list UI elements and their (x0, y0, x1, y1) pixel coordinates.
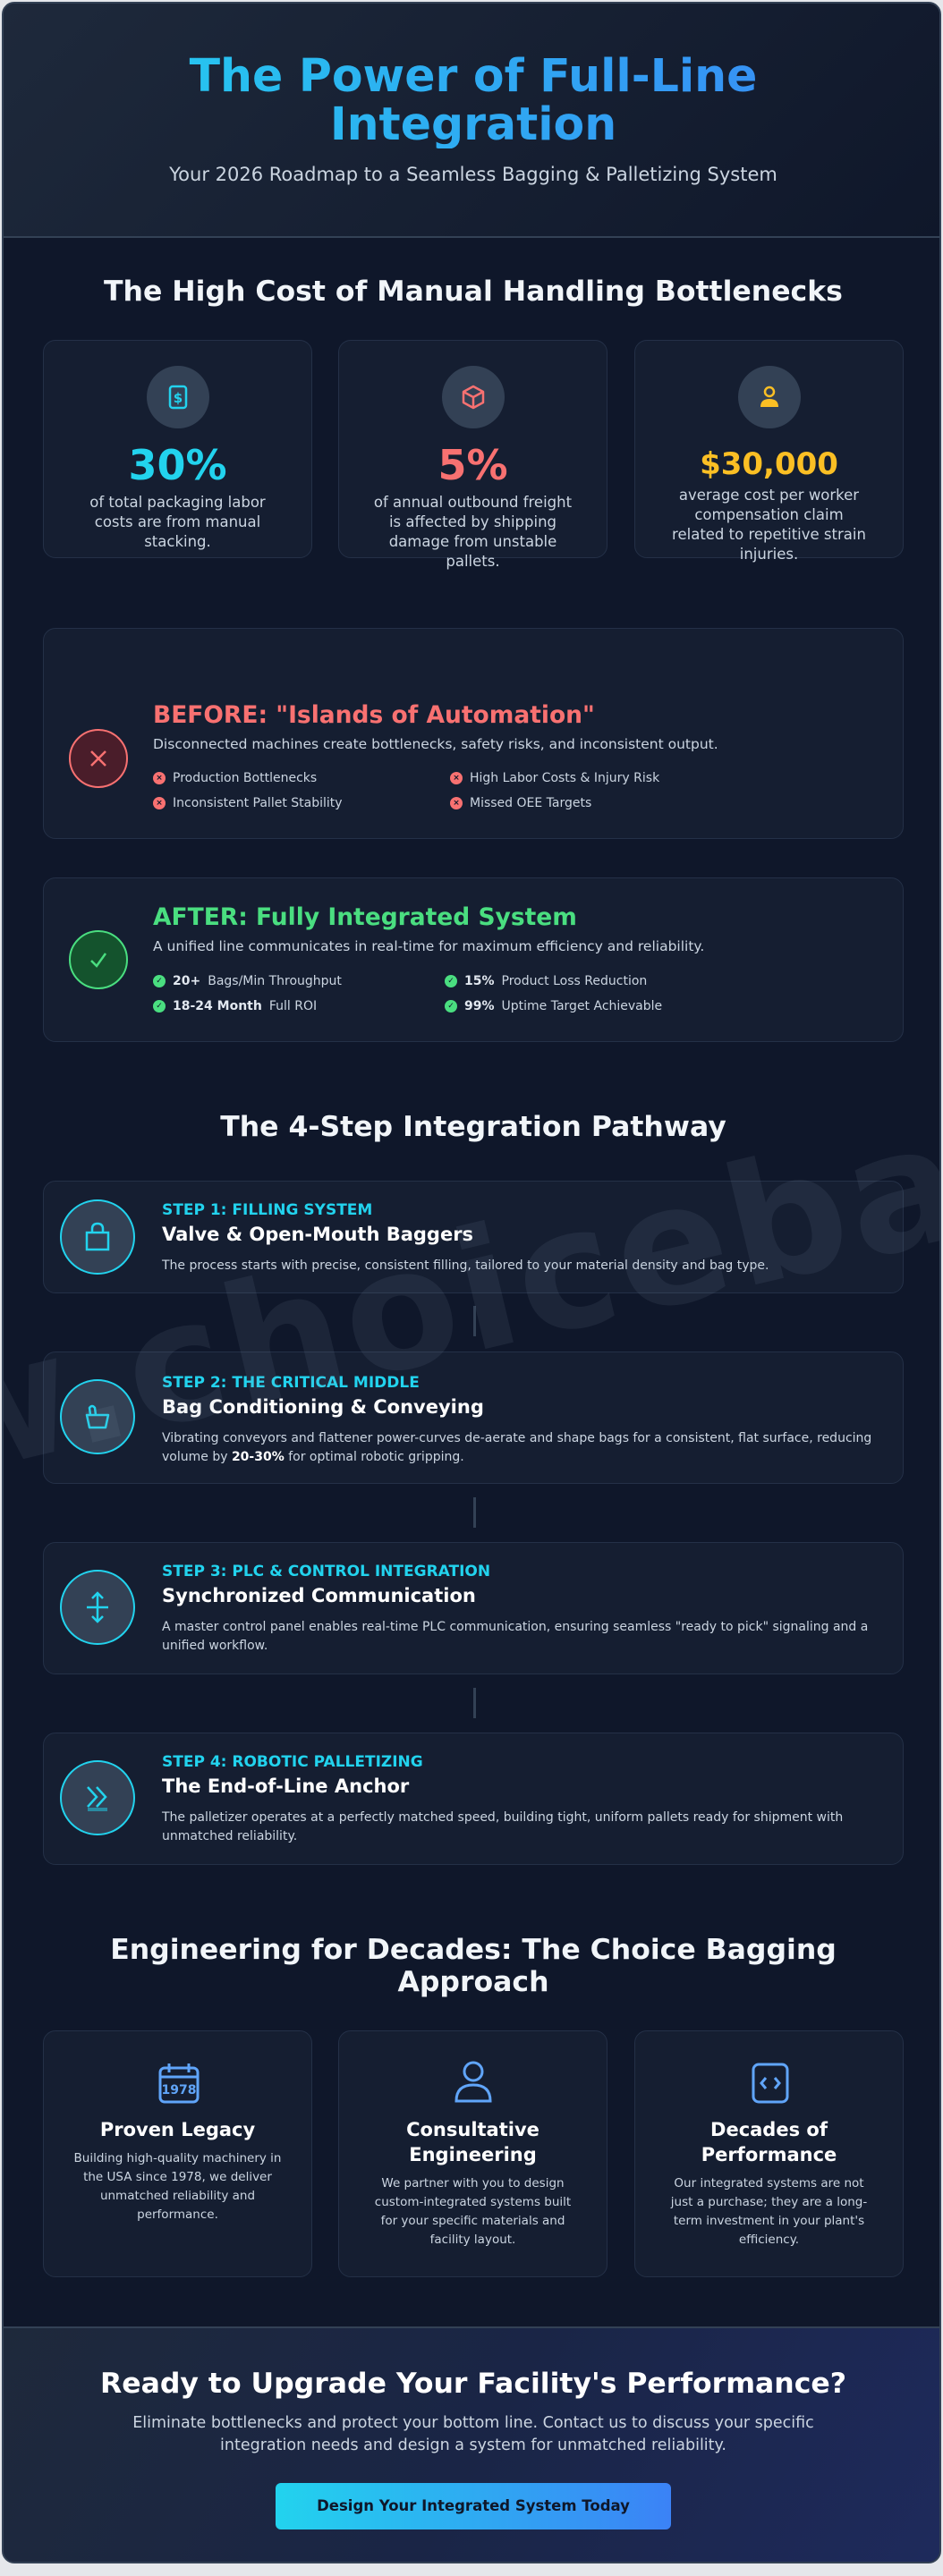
stat card 2 (338, 340, 607, 558)
title: Integration (330, 97, 616, 150)
before heading: BEFORE: "Islands of Automation" (153, 701, 595, 729)
section heading: high cost: The High Cost of Manual Handling Bottlenecks (104, 275, 843, 308)
step 3: A master control panel enables real-time PLC communication, ensuring seamless "ready to pick" signaling and a unified workflow. (162, 1620, 868, 1653)
stat card 1: of total packaging labor costs are from manual stacking. (89, 494, 266, 550)
step 1: STEP 1: FILLING SYSTEM (162, 1201, 372, 1219)
section heading: engineering (110, 1934, 837, 1998)
after bullets: Bags/Min Throughput (208, 974, 342, 988)
feature card 3: Decades of (710, 2119, 828, 2140)
icon: check (69, 930, 128, 989)
section heading: pathway: The 4-Step Integration Pathway (220, 1111, 726, 1143)
step 4 (43, 1733, 904, 1865)
step 1: Valve & Open-Mouth Baggers (162, 1224, 473, 1245)
feature card 1 (43, 2030, 312, 2277)
step 3 (43, 1542, 904, 1674)
icon: worker (738, 366, 801, 428)
before bullets: Production Bottlenecks (173, 771, 317, 785)
icon: code (752, 2063, 789, 2104)
feature card 2: Consultative (406, 2119, 539, 2140)
step 4: The End-of-Line Anchor (162, 1775, 409, 1797)
after bullets: ✓ (156, 1002, 163, 1011)
stat card 1 (43, 340, 312, 558)
stat card 2: 5% (438, 441, 508, 489)
before bullets: × (156, 799, 163, 808)
icon: hand (60, 1379, 135, 1454)
before bullets (153, 771, 660, 810)
before bullets: × (156, 774, 163, 783)
CTA section (4, 2326, 943, 2568)
step 4: The palletizer operates at a perfectly matched speed, building tight, uniform pallets ready for shipment with unmatched reliability. (162, 1810, 843, 1843)
after bullets: ✓ (447, 977, 455, 986)
section heading: engineering: Engineering for Decades: The Choice Bagging (110, 1934, 837, 1966)
panel: after: A unified line communicates in real-time for maximum efficiency and reliability. (153, 938, 704, 954)
stat card 3 (634, 340, 904, 558)
before bullets: × (453, 774, 460, 783)
step 2: STEP 2: THE CRITICAL MIDDLE (162, 1374, 420, 1392)
section heading: engineering: Approach (397, 1966, 549, 1998)
feature card 2 (338, 2030, 607, 2277)
step 3: STEP 3: PLC & CONTROL INTEGRATION (162, 1563, 490, 1580)
icon: bag (60, 1199, 135, 1275)
icon: money: $ (174, 390, 183, 406)
icon: user (455, 2061, 492, 2102)
feature card 2: Engineering (409, 2144, 537, 2165)
step 4: STEP 4: ROBOTIC PALLETIZING (162, 1753, 423, 1771)
CTA text: Eliminate bottlenecks and protect your bottom line. Contact us to discuss your specific integration needs and design a system for unmatched reliability. (132, 2414, 814, 2454)
panel: before: Disconnected machines create bottlenecks, safety risks, and inconsistent output. (153, 736, 718, 752)
feature card 2: We partner with you to design custom-integrated systems built for your specific materials and facility layout. (375, 2176, 571, 2247)
feature card 3 (634, 2030, 904, 2277)
step 2 (43, 1352, 904, 1484)
after bullets: 18-24 Month (173, 999, 262, 1013)
after bullets: 99% (464, 999, 495, 1013)
after bullets: Full ROI (269, 999, 317, 1013)
panel: after (43, 877, 904, 1042)
feature card 1: Proven Legacy (100, 2119, 255, 2140)
stat card 3: $30,000 (700, 446, 838, 482)
feature card 3: Performance (701, 2144, 837, 2165)
header (4, 4, 943, 238)
CTA heading: Ready to Upgrade Your Facility's Performance? (100, 2368, 846, 2400)
after bullets: Product Loss Reduction (502, 974, 647, 988)
after bullets: ✓ (156, 977, 163, 986)
panel: before (43, 628, 904, 839)
stat card 2: of annual outbound freight is affected by shipping damage from unstable pallets. (374, 494, 572, 570)
step 2: Vibrating conveyors and flattener power-curves de-aerate and shape bags for a consistent, flat surface, reducing volume by 20-30% for optimal robotic gripping. (162, 1431, 871, 1464)
step 3: Synchronized Communication (162, 1585, 476, 1606)
icon: calendar: 1978 (162, 2083, 196, 2097)
CTA button: Design Your Integrated System Today (317, 2497, 630, 2514)
title: The Power of Full-Line (190, 49, 757, 102)
icon: calendar (159, 2063, 199, 2104)
icon: x (69, 729, 128, 788)
icon: sync (60, 1570, 135, 1645)
after bullets: 20+ (173, 974, 200, 988)
icon: box (442, 366, 505, 428)
CTA button (276, 2483, 671, 2529)
after bullets (153, 974, 662, 1013)
after bullets: Uptime Target Achievable (502, 999, 662, 1013)
feature card 1: Building high-quality machinery in the USA since 1978, we deliver unmatched reliability and performance. (73, 2151, 281, 2222)
subtitle: Your 2026 Roadmap to a Seamless Bagging & Palletizing System (169, 164, 777, 185)
after bullets: 15% (464, 974, 495, 988)
title (4, 52, 943, 148)
before bullets: High Labor Costs & Injury Risk (470, 771, 659, 785)
icon: money (147, 366, 209, 428)
stat card 1: 30% (128, 441, 227, 489)
feature card 3: Our integrated systems are not just a purchase; they are a long-term investment in your plant's efficiency. (671, 2176, 867, 2247)
icon: chevrons (60, 1760, 135, 1835)
before bullets: × (453, 799, 460, 808)
after bullets: ✓ (447, 1002, 455, 1011)
before bullets: Inconsistent Pallet Stability (173, 796, 343, 810)
step 2: Bag Conditioning & Conveying (162, 1396, 484, 1418)
step 1: The process starts with precise, consistent filling, tailored to your material density and bag type. (162, 1258, 769, 1273)
stat card 3: average cost per worker compensation claim related to repetitive strain injuries. (672, 487, 866, 563)
after heading: AFTER: Fully Integrated System (153, 903, 577, 931)
step 1 (43, 1181, 904, 1293)
before bullets: Missed OEE Targets (470, 796, 591, 810)
